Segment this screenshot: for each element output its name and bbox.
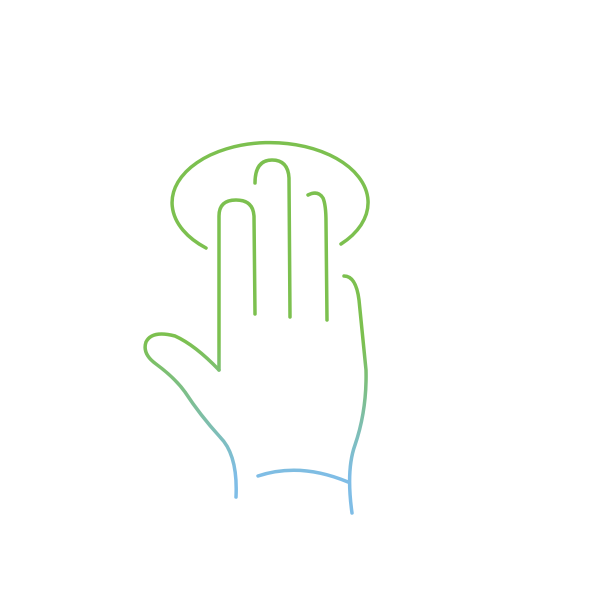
touch ellipse xyxy=(172,143,368,248)
wrist xyxy=(258,470,348,482)
index finger xyxy=(219,200,255,370)
ring finger xyxy=(308,193,327,320)
icon: hand xyxy=(145,143,368,513)
thumb xyxy=(145,334,236,497)
middle finger xyxy=(255,160,290,317)
pinky and hand edge xyxy=(344,276,366,513)
